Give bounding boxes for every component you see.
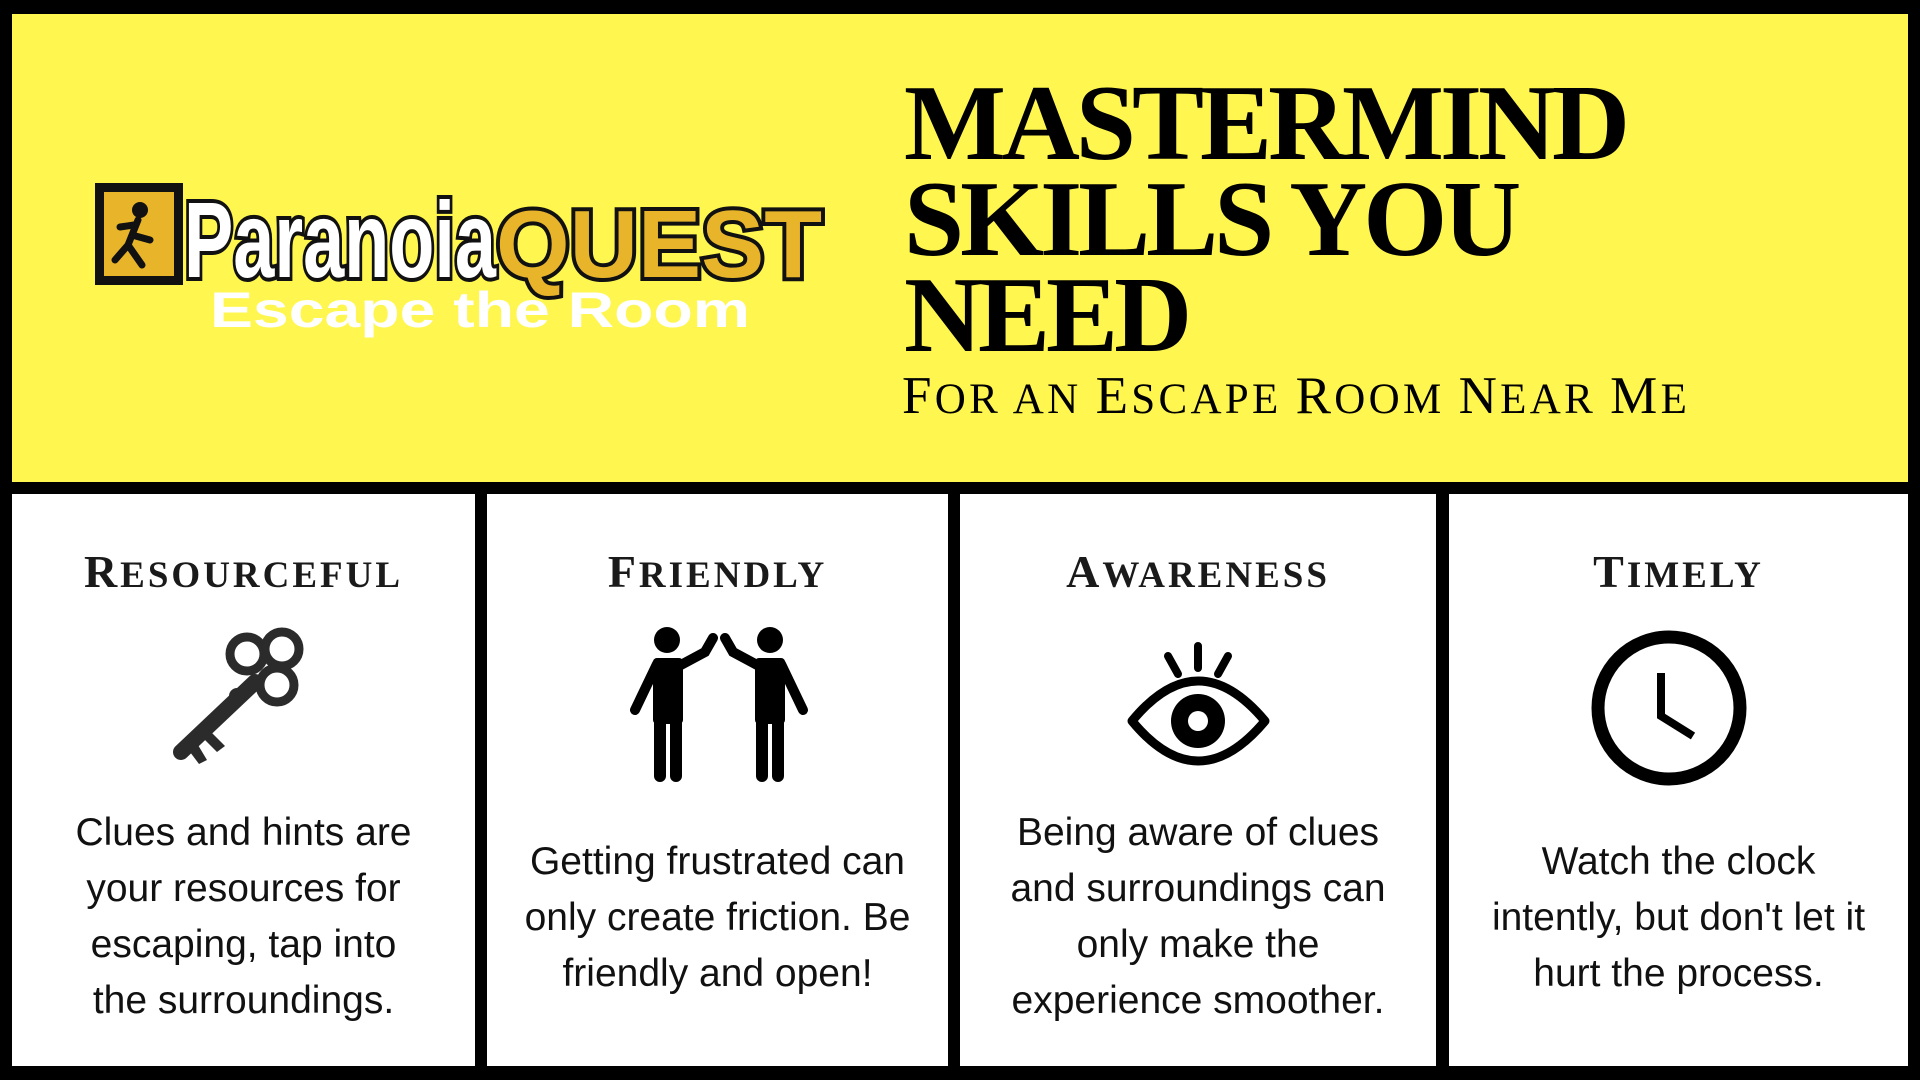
heading: friendly: FRIENDLY xyxy=(608,546,827,597)
heading: timely: TIMELY xyxy=(1593,546,1764,597)
icon: eye xyxy=(1128,642,1270,766)
icon: key xyxy=(173,628,304,764)
yellow header panel xyxy=(12,14,1908,482)
panel: resourceful xyxy=(12,494,475,1066)
text: timely: Watch the clock xyxy=(1542,840,1815,883)
panel: awareness xyxy=(960,494,1436,1066)
title xyxy=(904,64,1626,375)
text: friendly xyxy=(525,840,910,995)
text: awareness: only make the xyxy=(1077,923,1319,966)
text: resourceful: Clues and hints are xyxy=(75,811,412,854)
icon: running man door xyxy=(95,183,183,285)
icon: clock xyxy=(1592,630,1746,786)
text: awareness: and surroundings can xyxy=(1010,867,1386,910)
title: SKILLS YOU xyxy=(904,160,1517,279)
logo: Paranoia Quest xyxy=(95,179,825,338)
panel: friendly xyxy=(487,494,948,1066)
text: resourceful: escaping, tap into xyxy=(91,923,396,966)
icon: two people high five xyxy=(630,627,808,782)
text: friendly: only create friction. Be xyxy=(525,896,910,939)
text: awareness: Being aware of clues xyxy=(1017,811,1379,854)
text: resourceful: the surroundings. xyxy=(93,979,394,1022)
text: timely: hurt the process. xyxy=(1533,952,1824,995)
heading: resourceful: RESOURCEFUL xyxy=(84,546,403,597)
panel: timely xyxy=(1449,494,1908,1066)
title: NEED xyxy=(904,256,1188,375)
logo text: QUEST: QUEST xyxy=(496,191,822,298)
logo text: Paranoia: Paranoia xyxy=(184,179,497,300)
subtitle: FOR AN ESCAPE ROOM NEAR ME xyxy=(902,367,1690,425)
text: timely xyxy=(1492,840,1865,995)
text: awareness xyxy=(1010,811,1386,1022)
text: timely: intently, but don't let it xyxy=(1492,896,1865,939)
logo text: Escape the Room: Escape the Room xyxy=(210,282,750,338)
text: friendly: friendly and open! xyxy=(562,952,873,995)
heading: awareness: AWARENESS xyxy=(1066,546,1330,597)
text: resourceful xyxy=(75,811,412,1022)
title: MASTERMIND xyxy=(904,64,1626,183)
text: friendly: Getting frustrated can xyxy=(530,840,905,883)
text: resourceful: your resources for xyxy=(86,867,401,910)
text: awareness: experience smoother. xyxy=(1012,979,1384,1022)
